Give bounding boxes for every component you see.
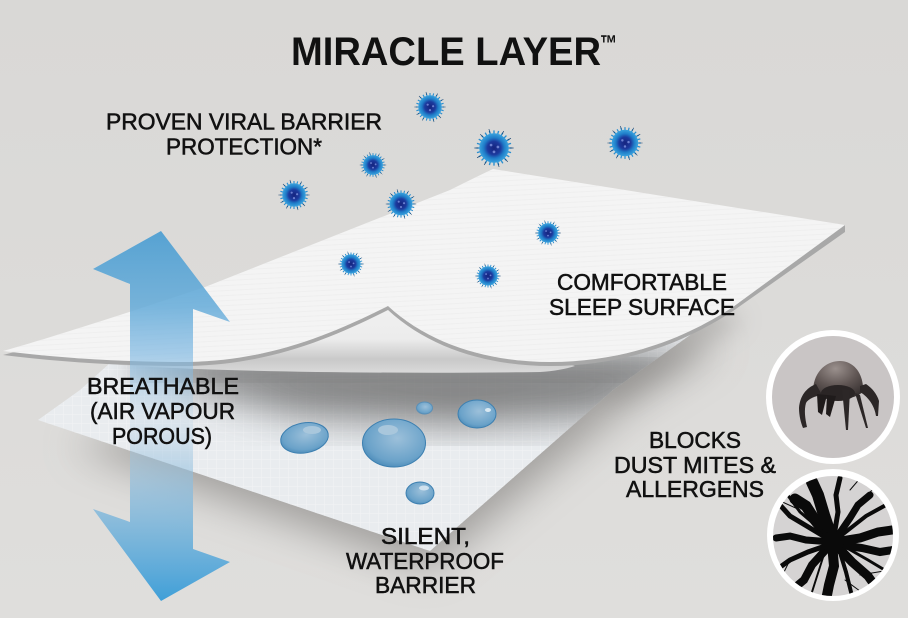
virus particles [278,92,643,288]
shadow under the sheets [70,300,745,570]
text: waterproof barrier: SILENT, [381,523,470,549]
arrow: up [93,231,230,420]
icon: allergen splatter in circle [767,469,899,601]
text: breathable: (AIR VAPOUR [90,398,235,424]
text: waterproof barrier: WATERPROOF [346,548,504,574]
water droplets [278,400,496,504]
text: waterproof barrier [346,523,504,598]
text: comfortable surface: COMFORTABLE [557,269,727,295]
text: dust mites: ALLERGENS [626,476,764,502]
text: viral barrier: PROVEN VIRAL BARRIER [106,108,382,134]
text: dust mites [614,427,776,502]
arrow: down [93,420,230,601]
text: viral barrier: PROTECTION* [166,134,322,160]
title: MIRACLE LAYER [291,30,601,74]
text: viral barrier [106,108,382,160]
icon: dust mite in circle [766,330,900,464]
top sheet edge thickness [3,225,845,366]
text: waterproof barrier: BARRIER [375,572,476,598]
text: breathable: POROUS) [112,423,212,449]
top sheet: comfortable sleep surface [3,169,845,362]
text: dust mites: DUST MITES & [614,452,776,478]
text: comfortable surface: SLEEP SURFACE [549,294,735,320]
text: dust mites: BLOCKS [649,427,741,453]
lower sheet: waterproof barrier [38,328,700,551]
text: breathable: BREATHABLE [87,373,239,399]
text: comfortable surface [549,269,735,320]
text: breathable [87,373,239,449]
underside of curled top sheet [110,302,575,373]
title: ™ [600,30,617,56]
